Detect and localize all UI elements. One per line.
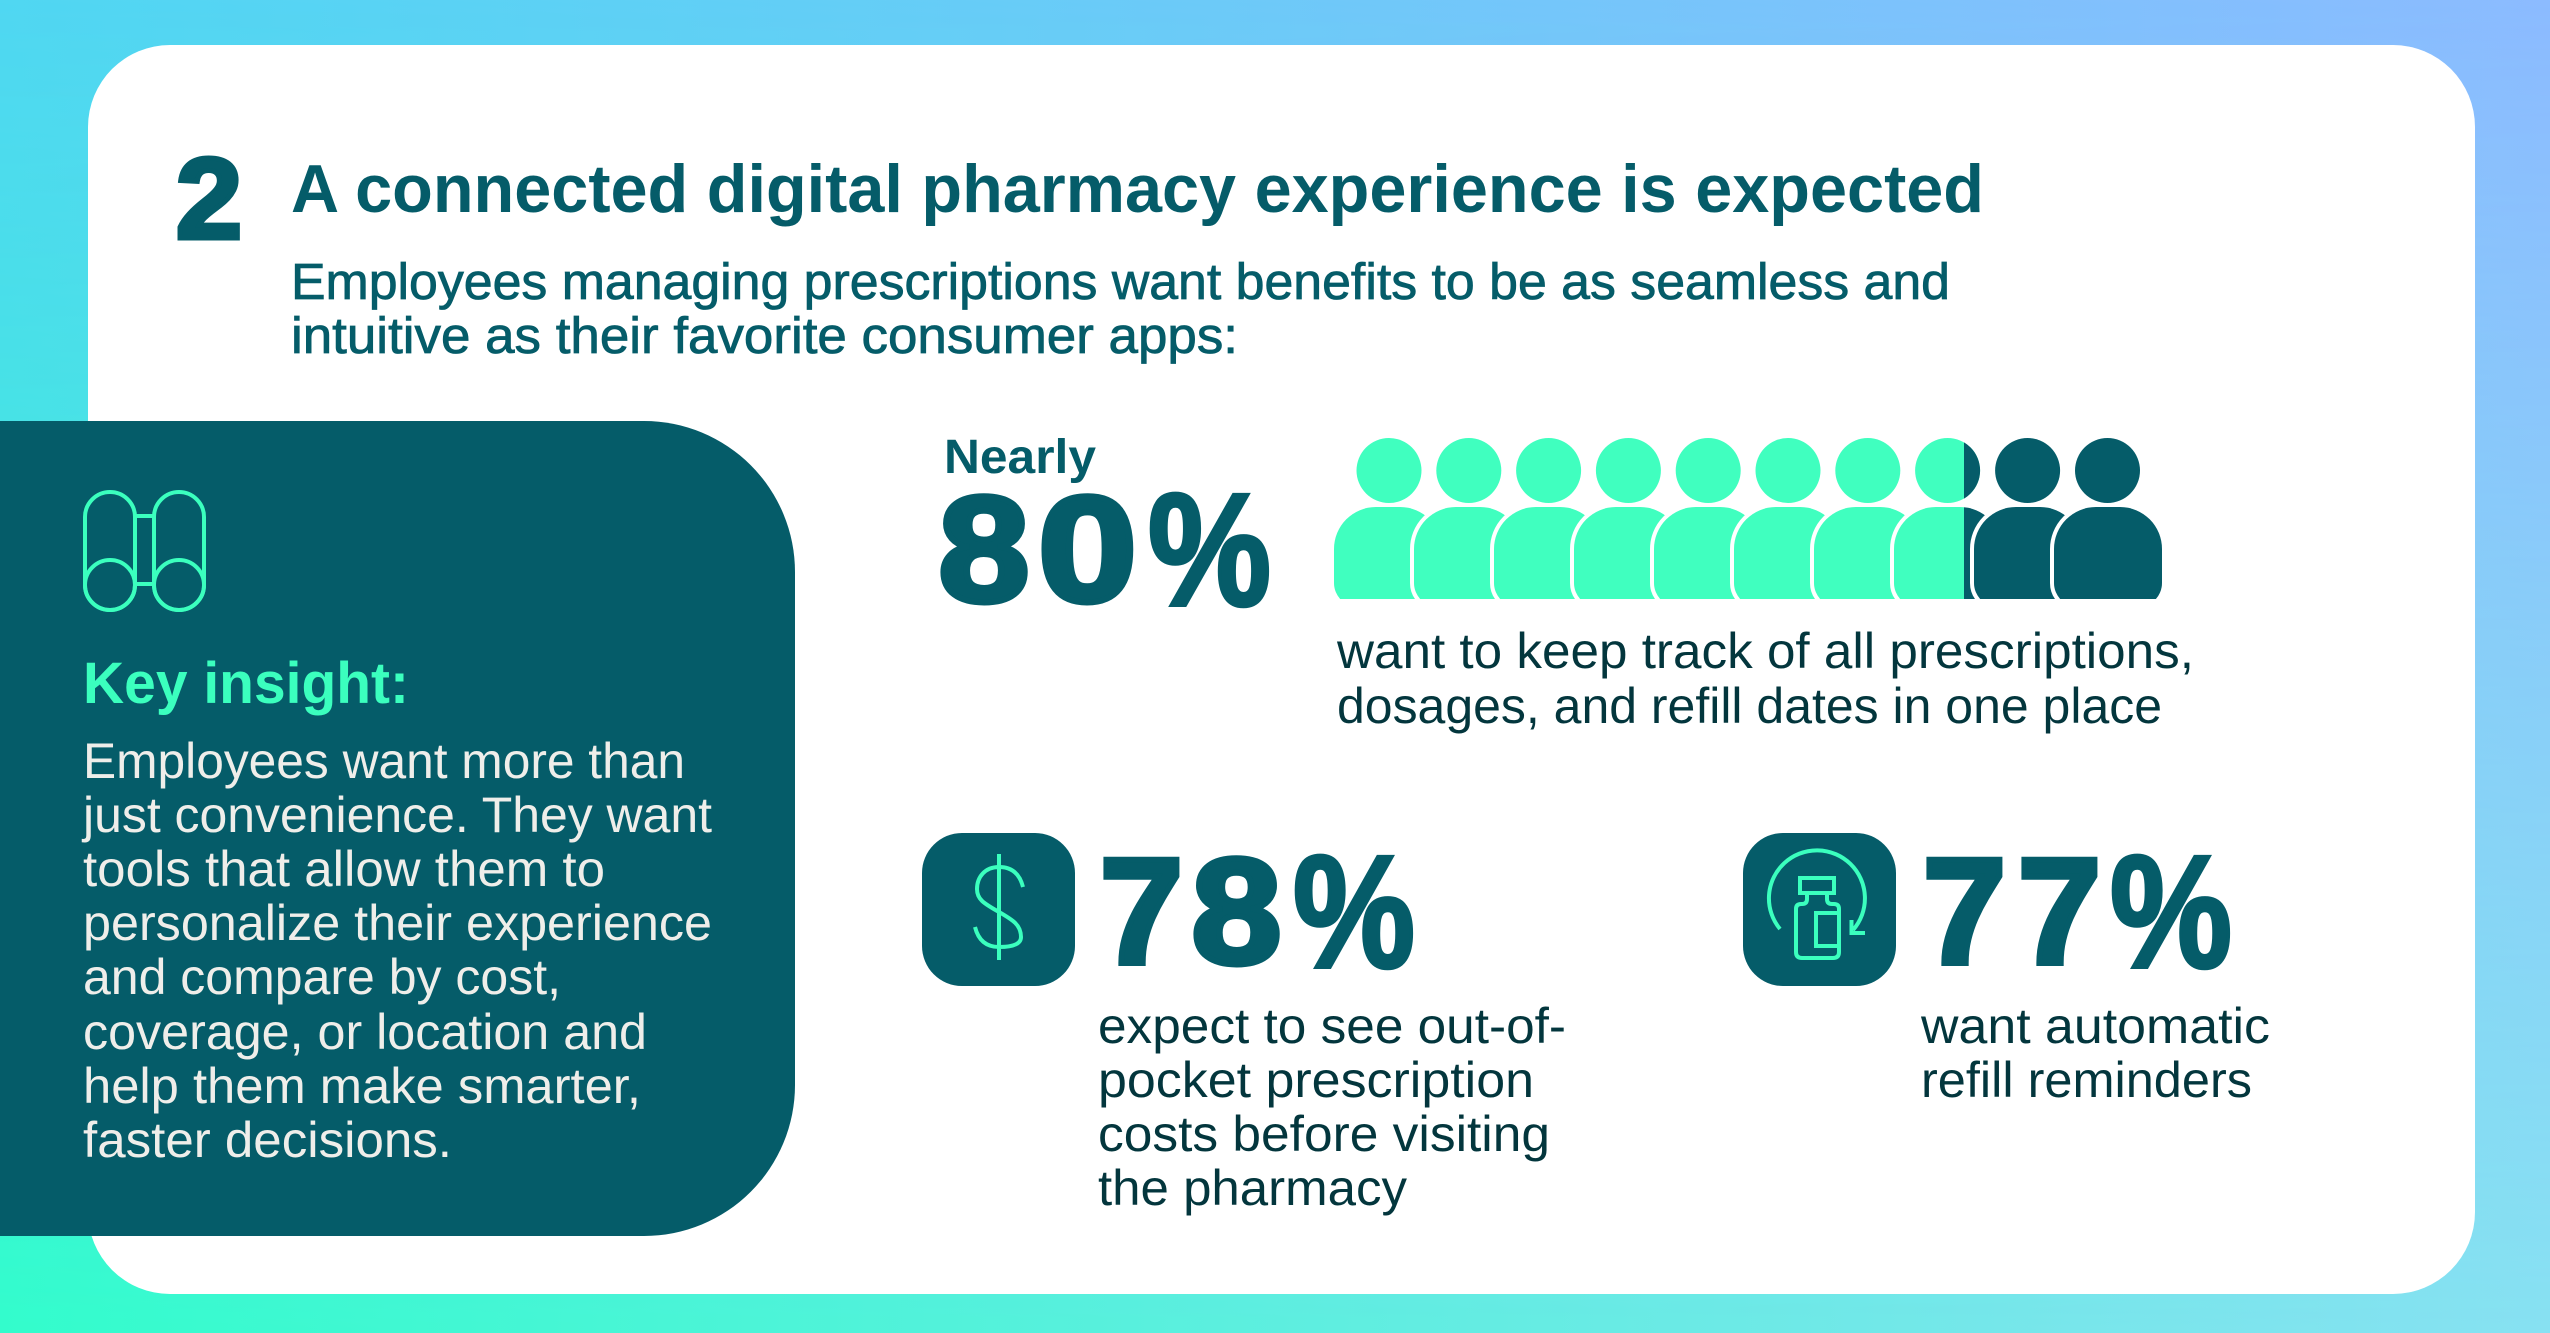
80% value: 0 [1038, 465, 1137, 633]
section number: 2 [176, 136, 242, 263]
78% value: 7 [1100, 827, 1183, 995]
78% value: % [1293, 822, 1415, 1001]
77% description: want automatic [1920, 998, 2270, 1054]
77% value: 7 [1923, 827, 2006, 995]
77% description [1920, 998, 2270, 1108]
header [176, 136, 1984, 364]
stat: 78% [922, 822, 1566, 1216]
77% value: % [2110, 822, 2232, 1001]
key insight body text: coverage, or location and [83, 1004, 647, 1060]
80% description [1336, 623, 2194, 734]
78% description: the pharmacy [1098, 1160, 1407, 1216]
78% description: pocket prescription [1098, 1052, 1534, 1108]
80% value: % [1148, 460, 1271, 639]
panel: key insight [0, 421, 795, 1236]
stat: nearly 80% [938, 431, 2194, 734]
key insight body text: just convenience. They want [81, 787, 712, 843]
80% description: want to keep track of all prescriptions, [1336, 623, 2194, 679]
key insight body text [81, 733, 712, 1168]
title: A connected digital pharmacy experience is expected [291, 151, 1984, 227]
subtitle: Employees managing prescriptions want benefits to be as seamless and [291, 253, 1950, 310]
subtitle: intuitive as their favorite consumer apps: [291, 307, 1238, 364]
pictogram: ten people, eight filled [1334, 438, 2162, 607]
stat: 77% [1743, 822, 2270, 1108]
78% description [1098, 998, 1566, 1216]
icon: dollar sign tile [922, 833, 1075, 986]
80% description: dosages, and refill dates in one place [1337, 678, 2162, 734]
key insight body text: and compare by cost, [83, 949, 561, 1005]
78% value: 8 [1192, 827, 1282, 995]
77% description: refill reminders [1921, 1052, 2252, 1108]
nearly label: Nearly [944, 431, 1096, 484]
subtitle [291, 253, 1950, 364]
key insight body text: personalize their experience [83, 895, 712, 951]
78% description: expect to see out-of- [1098, 998, 1566, 1054]
key insight heading: Key insight: [83, 651, 409, 716]
80% value: 8 [938, 465, 1030, 633]
icon: binoculars [85, 492, 204, 610]
key insight body text: Employees want more than [83, 733, 685, 789]
key insight body text: faster decisions. [83, 1112, 452, 1168]
key insight body text: help them make smarter, [83, 1058, 641, 1114]
icon: medicine bottle with refill arrow tile [1743, 833, 1896, 986]
78% description: costs before visiting [1098, 1106, 1550, 1162]
key insight body text: tools that allow them to [83, 841, 605, 897]
77% value: 7 [2018, 827, 2101, 995]
